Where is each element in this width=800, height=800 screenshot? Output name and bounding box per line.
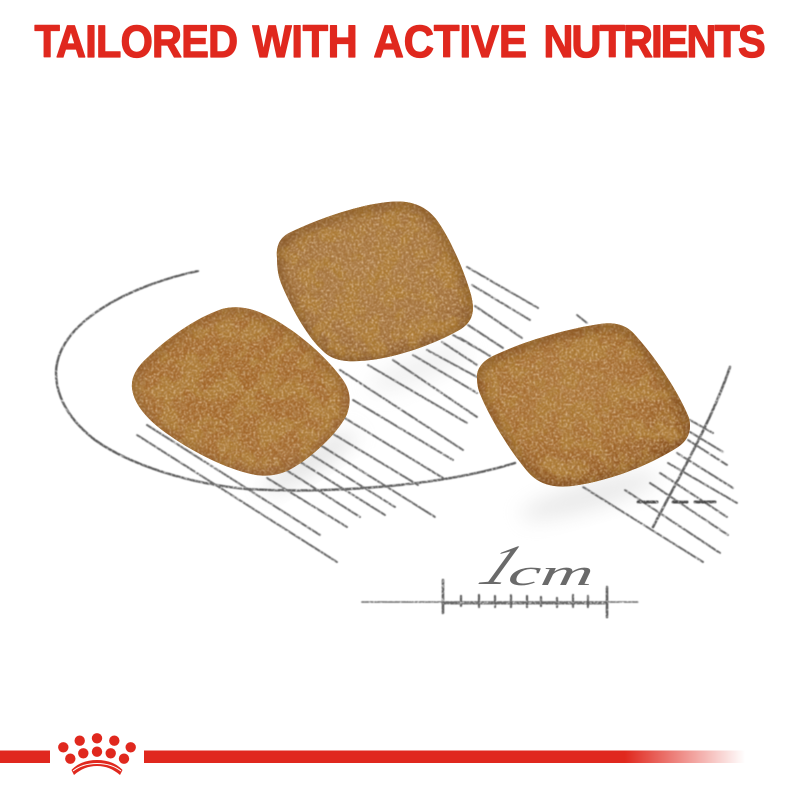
scale label: 1 cm	[469, 533, 596, 597]
icon: crown logo	[58, 733, 136, 775]
footer rule: right fading segment	[144, 750, 745, 763]
hatching under kibbles	[137, 267, 538, 562]
title	[34, 18, 765, 68]
title: ACTIVE	[374, 18, 527, 68]
kibble shadows	[258, 334, 663, 528]
scale label: 1 cm: 1	[469, 533, 534, 597]
hatching at right of plate	[577, 315, 737, 562]
kibble: right	[477, 323, 690, 489]
scale ruler	[362, 580, 638, 617]
plate sketch: pencil outline and hatching	[56, 267, 737, 562]
title: NUTRIENTS	[544, 18, 765, 68]
footer rule: left segment	[0, 750, 50, 763]
title: TAILORED	[34, 18, 237, 68]
plate outline	[56, 271, 515, 490]
kibble: top	[277, 202, 473, 363]
scale label: 1 cm: cm	[506, 553, 596, 594]
kibble: left	[132, 307, 350, 478]
title: WITH	[252, 18, 357, 68]
